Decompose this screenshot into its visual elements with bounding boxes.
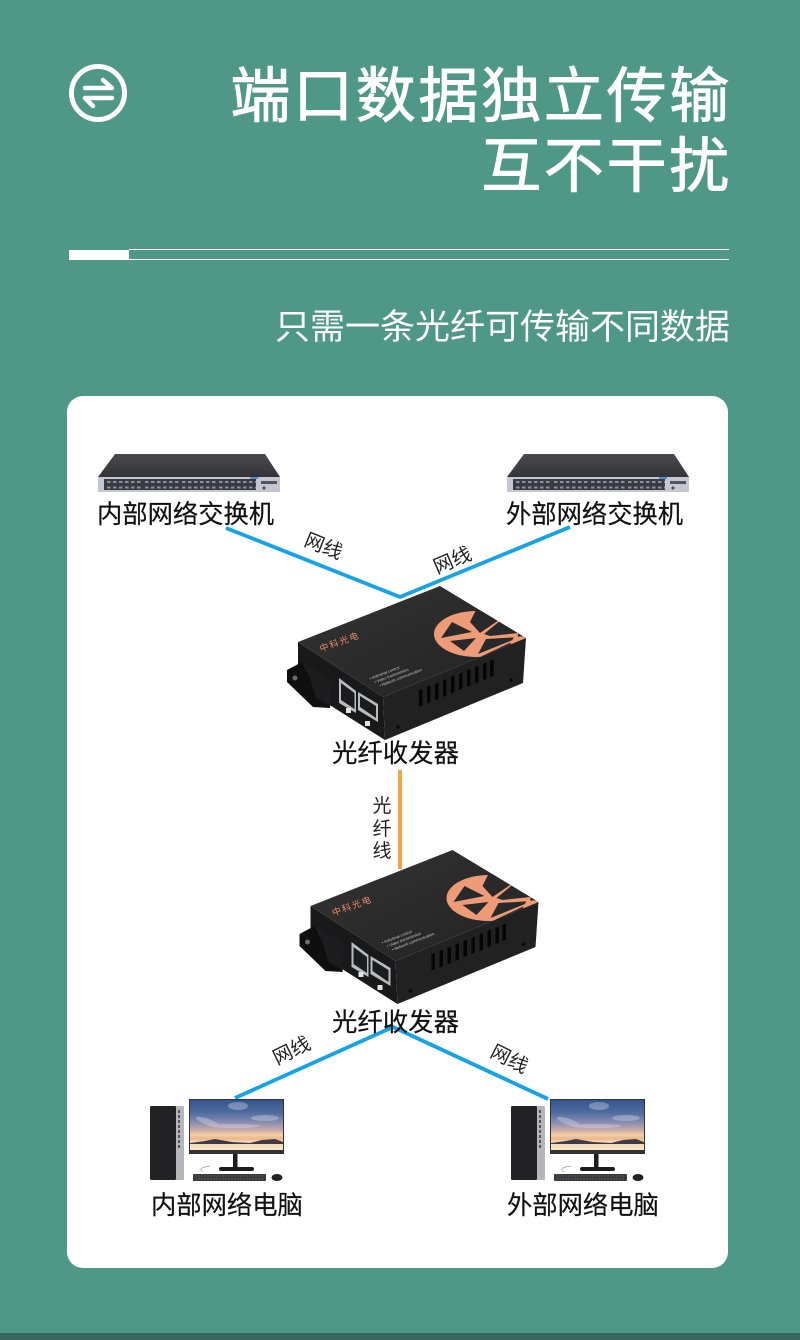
label: internal computer: 内部网络电脑	[151, 1192, 303, 1220]
connection: lower network cables	[235, 1027, 548, 1099]
label: upper transceiver: 光纤收发器	[332, 740, 459, 768]
label: cable right: 网线	[430, 543, 475, 579]
divider	[69, 249, 729, 260]
label: fiber cable: 光	[372, 795, 392, 817]
icon: lower fiber transceiver	[300, 850, 540, 1004]
label: fiber cable: 纤	[372, 818, 392, 840]
bottom stripe	[0, 1333, 800, 1340]
label: external computer: 外部网络电脑	[507, 1192, 659, 1220]
connection: upper network cables	[226, 527, 570, 597]
label: cable lower right: 网线	[487, 1041, 531, 1078]
icon: exchange arrows	[72, 66, 124, 120]
icon: external computer	[511, 1099, 645, 1181]
label: fiber cable: 线	[372, 840, 392, 862]
label: external switch: 外部网络交换机	[506, 501, 683, 529]
title: 互不干扰	[481, 133, 732, 200]
icon: external switch	[507, 454, 689, 492]
label: cable lower left: 网线	[270, 1033, 314, 1069]
label: internal switch: 内部网络交换机	[97, 501, 274, 529]
subtitle: 只需一条光纤可传输不同数据	[275, 308, 730, 347]
label: fiber cable	[372, 795, 392, 862]
label: lower transceiver: 光纤收发器	[332, 1009, 459, 1037]
connection: fiber optic cable	[398, 770, 402, 869]
icon: upper fiber transceiver	[287, 586, 528, 740]
label: cable left: 网线	[301, 529, 346, 564]
title: 端口数据独立传输	[230, 63, 732, 130]
icon: internal switch	[98, 454, 280, 492]
icon: internal computer	[150, 1099, 284, 1181]
title	[230, 63, 732, 200]
panel: network diagram	[67, 396, 728, 1268]
